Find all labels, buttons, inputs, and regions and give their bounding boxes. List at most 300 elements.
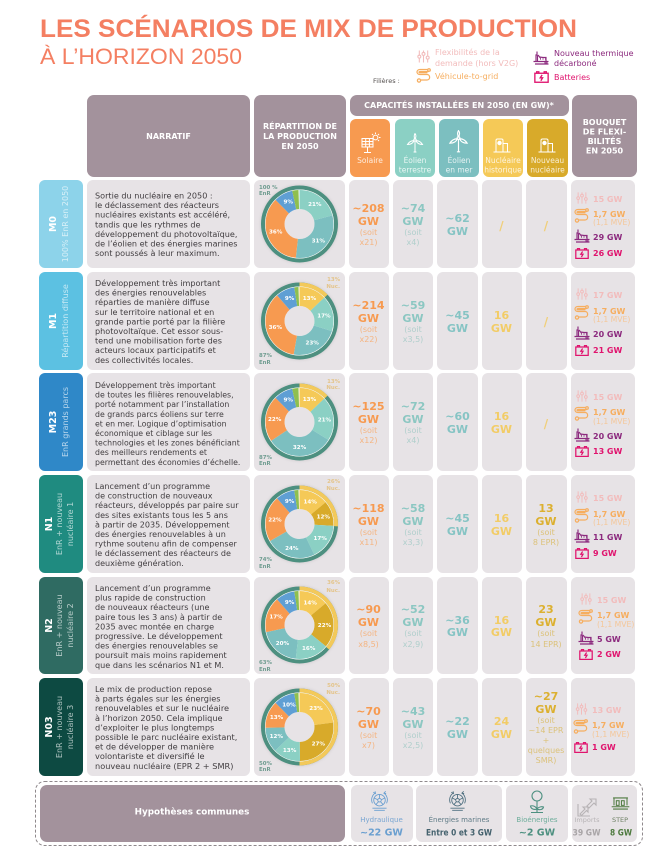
narrative: N03: à l’horizon 2050. Cela implique bbox=[95, 713, 223, 723]
scenario row: N03 bbox=[39, 678, 635, 776]
capacities: N2: GW bbox=[447, 626, 468, 639]
heading: hypothèses communes bbox=[40, 785, 345, 842]
header: capacités installées: CAPACITÉS INSTALLÉES EN 2050 (EN GW)* bbox=[364, 99, 555, 110]
capacities: N03: ~70 bbox=[356, 705, 381, 718]
capacities: N2 bbox=[349, 577, 567, 674]
flexibilities: N2: (1,1 MVE) bbox=[597, 620, 634, 629]
narrative: N2: progressive. Le développement bbox=[95, 631, 223, 641]
capacities: N1: 8 EPR) bbox=[533, 538, 559, 547]
label: N03: N03 bbox=[44, 716, 55, 738]
label: N1: EnR + nouveau bbox=[55, 493, 64, 555]
donut chart: M0: 31% bbox=[312, 238, 325, 244]
label: N03 bbox=[39, 678, 83, 776]
label: N1: N1 bbox=[44, 517, 55, 531]
label: N03: nucléaire 3 bbox=[65, 705, 75, 749]
donut chart: M23: 87% bbox=[259, 455, 273, 461]
narrative: N2: que dans les scénarios N1 et M. bbox=[95, 660, 224, 670]
narrative: N1: le déclassement des réacteurs de bbox=[95, 548, 231, 558]
flexibilities: N03: 13 GW bbox=[592, 706, 621, 715]
legend: filières: demande (hors V2G) bbox=[435, 59, 518, 68]
capacities: M1: GW bbox=[491, 322, 512, 335]
flexibilities: N1: 15 GW bbox=[593, 494, 622, 503]
narrative: M1: photovoltaïque. Cet essor sous- bbox=[95, 326, 223, 336]
narrative: M23: de toutes les filières renouvelables, bbox=[95, 391, 234, 400]
donut chart: N2: 14% bbox=[304, 600, 317, 606]
capacities: M1: ~59 bbox=[401, 299, 425, 312]
label: M1: Répartition diffuse bbox=[60, 284, 70, 358]
card: hydraulique bbox=[351, 785, 413, 842]
capacities: N03: (soit bbox=[537, 716, 555, 725]
label: M0: 100% EnR en 2050 bbox=[61, 186, 70, 262]
donut chart: M0: 9% bbox=[283, 200, 293, 206]
card: imports et STEP: 8 GW bbox=[610, 828, 632, 838]
donut chart: M23: 13% bbox=[327, 379, 341, 385]
capacities: N2: 23 bbox=[538, 603, 554, 616]
donut chart: N2: EnR bbox=[259, 667, 272, 673]
header: nucléaire historique: historique bbox=[484, 166, 522, 174]
narrative: M0: le déclassement des réacteurs bbox=[95, 200, 219, 210]
donut chart: M1: 36% bbox=[269, 325, 282, 331]
donut chart: M0: EnR bbox=[259, 191, 272, 197]
narrative: N03: possible le parc nucléaire existant, bbox=[95, 732, 237, 742]
capacities: N2: GW bbox=[358, 616, 379, 629]
flexibilities: M1 bbox=[571, 272, 635, 370]
narrative: M0: sont poussés à leur maximum. bbox=[95, 248, 220, 258]
flexibilities: N2 bbox=[571, 577, 635, 674]
capacities: M23: GW bbox=[491, 423, 512, 436]
donut chart: N2: Nuc. bbox=[326, 588, 340, 594]
capacities: M1: GW bbox=[402, 312, 424, 325]
header: solaire: Solaire bbox=[357, 156, 383, 165]
capacities: M23: ~72 bbox=[401, 400, 425, 413]
header: narratif bbox=[87, 95, 250, 177]
flexibilities: M23 bbox=[571, 373, 635, 471]
narrative: N03: Le mix de production repose bbox=[95, 684, 212, 694]
donut chart: M23: 9% bbox=[283, 398, 293, 404]
flexibilities: M1: 17 GW bbox=[593, 291, 622, 300]
narrative: N1: des énergies renouvelables à un bbox=[95, 529, 226, 539]
capacities: M0: / bbox=[544, 219, 549, 233]
capacities: M1: / bbox=[544, 315, 549, 329]
capacities: M23: x12) bbox=[359, 436, 378, 445]
narrative: N03: renouvelables et sur le nucléaire bbox=[95, 703, 229, 713]
donut chart: N1: 26% bbox=[327, 479, 341, 485]
capacities: M1: GW bbox=[447, 322, 468, 335]
flexibilities: N1: 1,7 GW bbox=[593, 510, 626, 519]
flexibilities: N03: (1,1 MVE) bbox=[592, 730, 629, 739]
flexibilities: N1: 9 GW bbox=[593, 549, 617, 558]
donut chart: N1 bbox=[254, 475, 345, 573]
donut chart: M1: 9% bbox=[285, 296, 295, 302]
flexibilities: N03: 1,7 GW bbox=[592, 721, 625, 730]
donut chart: M1 bbox=[254, 272, 345, 370]
donut chart: M0: 36% bbox=[269, 230, 283, 236]
narrative: N2: paire tous les 3 ans) à partir de bbox=[95, 612, 222, 622]
narrative: M23: de grands parcs éoliens sur terre bbox=[95, 410, 224, 419]
donut chart: N2: 17% bbox=[269, 614, 283, 620]
scenario row: N1 bbox=[39, 475, 635, 573]
donut chart: N2: 63% bbox=[259, 660, 273, 666]
capacities: M0: GW bbox=[402, 215, 424, 228]
title bbox=[40, 14, 577, 69]
label: N2: EnR + nouveau bbox=[55, 594, 64, 657]
donut chart: N03: 13% bbox=[283, 748, 297, 754]
capacities: M23: ~125 bbox=[352, 400, 385, 413]
narrative: N2: poursuit mais moins rapidement bbox=[95, 650, 227, 660]
label: N03: EnR + nouveau bbox=[55, 696, 64, 758]
capacities: N2: (soit bbox=[360, 629, 377, 638]
donut chart: M23: 13% bbox=[303, 397, 316, 403]
donut chart: N03: 12% bbox=[270, 734, 283, 740]
capacities: M0: x21) bbox=[359, 238, 378, 247]
capacities: N2: (soit bbox=[404, 629, 422, 638]
donut chart: N2: 22% bbox=[318, 623, 332, 629]
capacities: M1: x22) bbox=[359, 335, 378, 344]
header: éolien en mer: Éolien bbox=[448, 156, 471, 165]
label: N1 bbox=[39, 475, 83, 573]
donut chart: N1: 24% bbox=[285, 546, 299, 552]
capacities: N1: x3,3) bbox=[403, 538, 423, 547]
narrative: N1: Lancement d’un programme bbox=[95, 482, 210, 491]
donut chart: M0: 21% bbox=[308, 202, 322, 208]
narrative: N03 bbox=[87, 678, 250, 776]
capacities: M23: 16 bbox=[494, 410, 509, 423]
capacities: M0: ~208 bbox=[352, 202, 385, 215]
header: bouquet de flexibilités bbox=[572, 95, 637, 177]
donut chart: N1: 9% bbox=[285, 499, 295, 505]
capacities: N1: GW bbox=[535, 515, 557, 528]
flexibilities: N2: 2 GW bbox=[597, 650, 621, 659]
capacities: N2: ~36 bbox=[445, 614, 470, 627]
capacities: N1: GW bbox=[491, 525, 512, 538]
header: narratif: NARRATIF bbox=[146, 132, 191, 141]
narrative: M1: sur le territoire national et en bbox=[95, 307, 214, 317]
card: imports et STEP: 39 GW bbox=[572, 828, 601, 838]
card: hydraulique: ~22 GW bbox=[360, 828, 403, 838]
flexibilities: N1: 11 GW bbox=[593, 533, 622, 542]
donut chart: M1: 13% bbox=[303, 296, 316, 302]
capacities: N03: x2,5) bbox=[403, 741, 423, 750]
donut chart: M23: 22% bbox=[268, 417, 282, 423]
capacities: M1: ~45 bbox=[445, 309, 470, 322]
donut chart: N03: 10% bbox=[282, 702, 296, 708]
capacities: N03: + bbox=[543, 736, 549, 745]
capacities: N1 bbox=[349, 475, 567, 573]
header: éolien en mer: en mer bbox=[446, 166, 473, 174]
donut chart: N1: EnR bbox=[259, 564, 272, 570]
flexibilities: N03: 1 GW bbox=[592, 743, 616, 752]
capacities: N1: ~58 bbox=[401, 502, 425, 515]
title: À L’HORIZON 2050 bbox=[40, 44, 242, 69]
narrative: N1: deuxième génération. bbox=[95, 558, 184, 568]
narrative: M1: tend une mobilisation forte des bbox=[95, 336, 222, 346]
capacities: M23 bbox=[349, 373, 567, 471]
legend: filières: décarboné bbox=[554, 58, 597, 68]
donut chart: M23 bbox=[254, 373, 345, 471]
header: solaire bbox=[350, 119, 390, 177]
header: bouquet de flexibilités: BILITÉS bbox=[588, 135, 622, 146]
capacities: M23: / bbox=[544, 417, 549, 431]
header: répartition de la production: RÉPARTITION DE bbox=[263, 120, 337, 131]
card: énergies marines: Énergies marines bbox=[429, 815, 490, 824]
capacities: M23: GW bbox=[447, 423, 468, 436]
narrative: M0: nucléaires existants est accéléré, bbox=[95, 210, 230, 220]
capacities: N2: GW bbox=[535, 616, 557, 629]
title: LES SCÉNARIOS DE MIX DE PRODUCTION bbox=[40, 14, 577, 43]
scenario row: N2 bbox=[39, 577, 635, 674]
narrative: M23: permettant des économies d’échelle. bbox=[95, 458, 240, 467]
narrative: M23: économique et ciblage sur les bbox=[95, 429, 212, 438]
flexibilities: M0: (1,1 MVE) bbox=[593, 218, 630, 227]
capacities: N2: GW bbox=[402, 616, 424, 629]
narrative: N1 bbox=[87, 475, 250, 573]
card: imports et STEP bbox=[572, 785, 637, 842]
capacities: M0 bbox=[349, 180, 567, 268]
header: nouveau nucléaire: nucléaire bbox=[530, 166, 565, 174]
flexibilities: N1: (1,1 MVE) bbox=[593, 518, 630, 527]
flexibilities: M0 bbox=[571, 180, 635, 268]
capacities: M0: GW bbox=[447, 225, 468, 238]
capacities: M23: ~60 bbox=[445, 410, 470, 423]
narrative: M23: technologies et les zones bénéficiant bbox=[95, 439, 240, 448]
narrative: N2: Lancement d’un programme bbox=[95, 583, 211, 593]
legend: filières: Flexibilités de la bbox=[435, 47, 500, 57]
capacities: N2: 16 bbox=[494, 614, 509, 627]
narrative: N03: à parts égales sur les énergies bbox=[95, 694, 221, 704]
donut chart: M1: 13% bbox=[327, 277, 341, 283]
narrative: M0: de l’éolien et des énergies marines bbox=[95, 238, 237, 248]
flexibilities: M1: 21 GW bbox=[593, 346, 622, 355]
donut chart: N03: EnR bbox=[259, 767, 272, 773]
header: nucléaire historique: Nucléaire bbox=[485, 156, 521, 165]
label: M23 bbox=[39, 373, 83, 471]
capacities: N2: ~90 bbox=[356, 603, 381, 616]
scenario row: M23 bbox=[39, 373, 635, 471]
card: bioénergies: ~2 GW bbox=[519, 828, 556, 838]
donut chart: M23: Nuc. bbox=[326, 385, 340, 391]
capacities: N03: SMR) bbox=[536, 756, 556, 765]
donut chart: N2: 20% bbox=[276, 641, 289, 647]
capacities: N2: x2,9) bbox=[403, 640, 423, 649]
capacities: N03 bbox=[349, 678, 567, 776]
flexibilities: M23: 20 GW bbox=[593, 432, 622, 441]
capacities: M23: GW bbox=[358, 413, 379, 426]
legend: filières: Nouveau thermique bbox=[554, 49, 634, 58]
scenario row: M0 bbox=[39, 180, 635, 268]
capacities: M0: (soit bbox=[360, 228, 377, 237]
narrative: N1: de construction de nouveaux bbox=[95, 492, 213, 501]
capacities: N03: GW bbox=[447, 728, 468, 741]
header: répartition de la production: LA PRODUCTION bbox=[263, 132, 337, 141]
capacities: N03: GW bbox=[535, 703, 557, 716]
label: N2: N2 bbox=[44, 618, 55, 633]
label: N2: nucléaire 2 bbox=[65, 603, 75, 648]
label: M23: M23 bbox=[48, 411, 59, 433]
narrative: M23 bbox=[87, 373, 250, 471]
capacities: N1: ~45 bbox=[445, 512, 470, 525]
card: bioénergies: Bioénergies bbox=[516, 816, 558, 824]
label: M1: M1 bbox=[48, 313, 59, 329]
donut chart: M23: EnR bbox=[259, 461, 272, 467]
narrative: M23: et en mer. Logique d’optimisation bbox=[95, 419, 227, 428]
capacities: N03: GW bbox=[402, 718, 424, 731]
donut chart: N1: 74% bbox=[259, 557, 273, 563]
donut chart: N03: 23% bbox=[309, 706, 323, 712]
card: énergies marines: Entre 0 et 3 GW bbox=[426, 828, 492, 838]
capacities: M1: GW bbox=[358, 312, 379, 325]
flexibilities: M1: 20 GW bbox=[593, 330, 622, 339]
flexibilities: M23: 13 GW bbox=[593, 447, 622, 456]
flexibilities: M0: 29 GW bbox=[593, 233, 622, 242]
capacities: M1: (soit bbox=[404, 325, 422, 334]
flexibilities: N2: 5 GW bbox=[597, 635, 621, 644]
header: éolien terrestre: terrestre bbox=[399, 166, 432, 174]
donut chart: N2 bbox=[254, 577, 345, 674]
capacities: M23: GW bbox=[402, 413, 424, 426]
donut chart: N2: 36% bbox=[327, 580, 341, 586]
narrative: N1: des sites existants tous les 5 ans bbox=[95, 511, 228, 520]
flexibilities: N2: 1,7 GW bbox=[597, 611, 630, 620]
narrative: M1: grande partie porté par la filière bbox=[95, 316, 225, 326]
capacities: N2: 14 EPR) bbox=[530, 640, 562, 649]
header: éolien en mer bbox=[439, 119, 479, 177]
donut chart: N1: 22% bbox=[268, 517, 282, 523]
flexibilities: M0: 26 GW bbox=[593, 249, 622, 258]
donut chart: M0: 100 % bbox=[259, 185, 278, 191]
donut chart: M0 bbox=[254, 180, 345, 268]
heading: hypothèses communes: Hypothèses communes bbox=[135, 806, 249, 818]
narrative: N03: nouveau nucléaire (EPR 2 + SMR) bbox=[95, 761, 233, 771]
header: bouquet de flexibilités: EN 2050 bbox=[586, 146, 624, 156]
capacities: M0: ~74 bbox=[401, 202, 426, 215]
label: M0: M0 bbox=[48, 216, 59, 232]
label: M0 bbox=[39, 180, 83, 268]
card: bioénergies bbox=[506, 785, 568, 842]
donut chart: N1: 17% bbox=[314, 536, 327, 542]
donut chart: M1: 87% bbox=[259, 353, 273, 359]
narrative: N1: rythme soutenu afin de compenser bbox=[95, 540, 238, 549]
narrative: N2: des énergies renouvelables se bbox=[95, 641, 218, 651]
narrative: M23: des meilleurs rendements et bbox=[95, 448, 207, 457]
narrative: N03: et de développer de manière bbox=[95, 742, 214, 752]
capacities: N1: GW bbox=[447, 525, 468, 538]
capacities: N03: x7) bbox=[362, 741, 375, 750]
donut chart: N03 bbox=[254, 678, 345, 776]
flexibilities: M23: (1,1 MVE) bbox=[593, 417, 630, 426]
donut chart: N2: 9% bbox=[285, 600, 295, 606]
flexibilities: N03 bbox=[571, 678, 635, 776]
capacities: M0: ~62 bbox=[445, 212, 470, 225]
capacities: N1: (soit bbox=[404, 528, 422, 537]
flexibilities: N1 bbox=[571, 475, 635, 573]
capacities: N03: ~27 bbox=[534, 690, 558, 703]
narrative: M0 bbox=[87, 180, 250, 268]
capacities: N1: ~118 bbox=[352, 502, 385, 515]
donut chart: N03: 27% bbox=[312, 742, 325, 748]
donut chart: M1: 23% bbox=[306, 340, 319, 346]
narrative: M1 bbox=[87, 272, 250, 370]
header: répartition de la production: EN 2050 bbox=[281, 142, 319, 151]
capacities: M23: (soit bbox=[404, 426, 422, 435]
capacities: M23: (soit bbox=[360, 426, 377, 435]
donut chart: N03: 13% bbox=[270, 715, 284, 721]
capacities: M0: / bbox=[499, 219, 504, 233]
header: bouquet de flexibilités: DE FLEXI- bbox=[583, 128, 626, 136]
header: capacités installées bbox=[350, 95, 569, 116]
card: énergies marines bbox=[416, 785, 502, 842]
capacities: M1: 16 bbox=[494, 309, 509, 322]
capacities: N03: (soit bbox=[404, 731, 422, 740]
capacities: N03: (soit bbox=[360, 731, 377, 740]
narrative: M1: Développement très important bbox=[95, 278, 220, 288]
capacities: N1: GW bbox=[358, 515, 379, 528]
capacities: N03: quelques bbox=[528, 746, 564, 755]
narrative: N2: 2035 avec montée en charge bbox=[95, 621, 214, 631]
capacities: N2: ~52 bbox=[401, 603, 425, 616]
donut chart: N1: 12% bbox=[317, 514, 330, 520]
donut chart: M1: Nuc. bbox=[326, 284, 340, 290]
narrative: N03: volontariste et diversifié le bbox=[95, 751, 205, 761]
narrative: M0: Sortie du nucléaire en 2050 : bbox=[95, 190, 213, 200]
capacities: M23: x4) bbox=[407, 436, 419, 445]
header: nouveau nucléaire bbox=[527, 119, 568, 177]
narrative: M1: des énergies renouvelables bbox=[95, 288, 206, 298]
capacities: M1 bbox=[349, 272, 567, 370]
donut chart: N2: 16% bbox=[302, 646, 316, 652]
capacities: M1: (soit bbox=[360, 325, 377, 334]
narrative: M1: acteurs locaux participatifs et bbox=[95, 345, 216, 355]
donut chart: N03: Nuc. bbox=[326, 690, 340, 696]
capacities: M0: (soit bbox=[404, 228, 422, 237]
capacities: N03: ~14 EPR bbox=[529, 726, 564, 735]
capacities: N1: GW bbox=[402, 515, 424, 528]
capacities: M0: x4) bbox=[407, 238, 419, 247]
donut chart: M1: 17% bbox=[317, 314, 331, 320]
capacities: N03: ~43 bbox=[401, 705, 425, 718]
legend: filières: Batteries bbox=[554, 73, 590, 82]
label: N2 bbox=[39, 577, 83, 674]
header: éolien terrestre bbox=[395, 119, 435, 177]
donut chart: M23: 21% bbox=[318, 418, 331, 424]
label: M1 bbox=[39, 272, 83, 370]
capacities: N03: ~22 bbox=[445, 715, 470, 728]
flexibilities: M0: 1,7 GW bbox=[593, 210, 626, 219]
capacities: N2: x8,5) bbox=[358, 640, 379, 649]
capacities: N03: GW bbox=[491, 728, 512, 741]
narrative: M0: développement du photovoltaïque, bbox=[95, 229, 237, 239]
header: nucléaire historique bbox=[483, 119, 523, 177]
donut chart: N03: 50% bbox=[327, 683, 341, 689]
narrative: M1: réparties de manière diffuse bbox=[95, 297, 210, 307]
capacities: N1: x11) bbox=[359, 538, 378, 547]
flexibilities: M0: 15 GW bbox=[593, 195, 622, 204]
capacities: M0: GW bbox=[358, 215, 379, 228]
header: bouquet de flexibilités: BOUQUET bbox=[583, 118, 627, 127]
donut chart: M23: 32% bbox=[293, 445, 307, 451]
capacities: N1: (soit bbox=[537, 528, 555, 537]
capacities: M1: x3,5) bbox=[403, 335, 423, 344]
legend: filières bbox=[373, 47, 634, 85]
header: nouveau nucléaire: Nouveau bbox=[531, 156, 564, 165]
capacities: N1: 16 bbox=[494, 512, 509, 525]
capacities: M1: ~214 bbox=[352, 299, 385, 312]
narrative: N1: à partir de 2035. Développement bbox=[95, 519, 230, 529]
capacities: N2: (soit bbox=[537, 629, 555, 638]
card: imports et STEP: Imports bbox=[575, 816, 600, 824]
flexibilities: M23: 15 GW bbox=[593, 393, 622, 402]
capacities: N03: GW bbox=[358, 718, 379, 731]
flexibilities: M1: (1,1 MVE) bbox=[593, 315, 630, 324]
